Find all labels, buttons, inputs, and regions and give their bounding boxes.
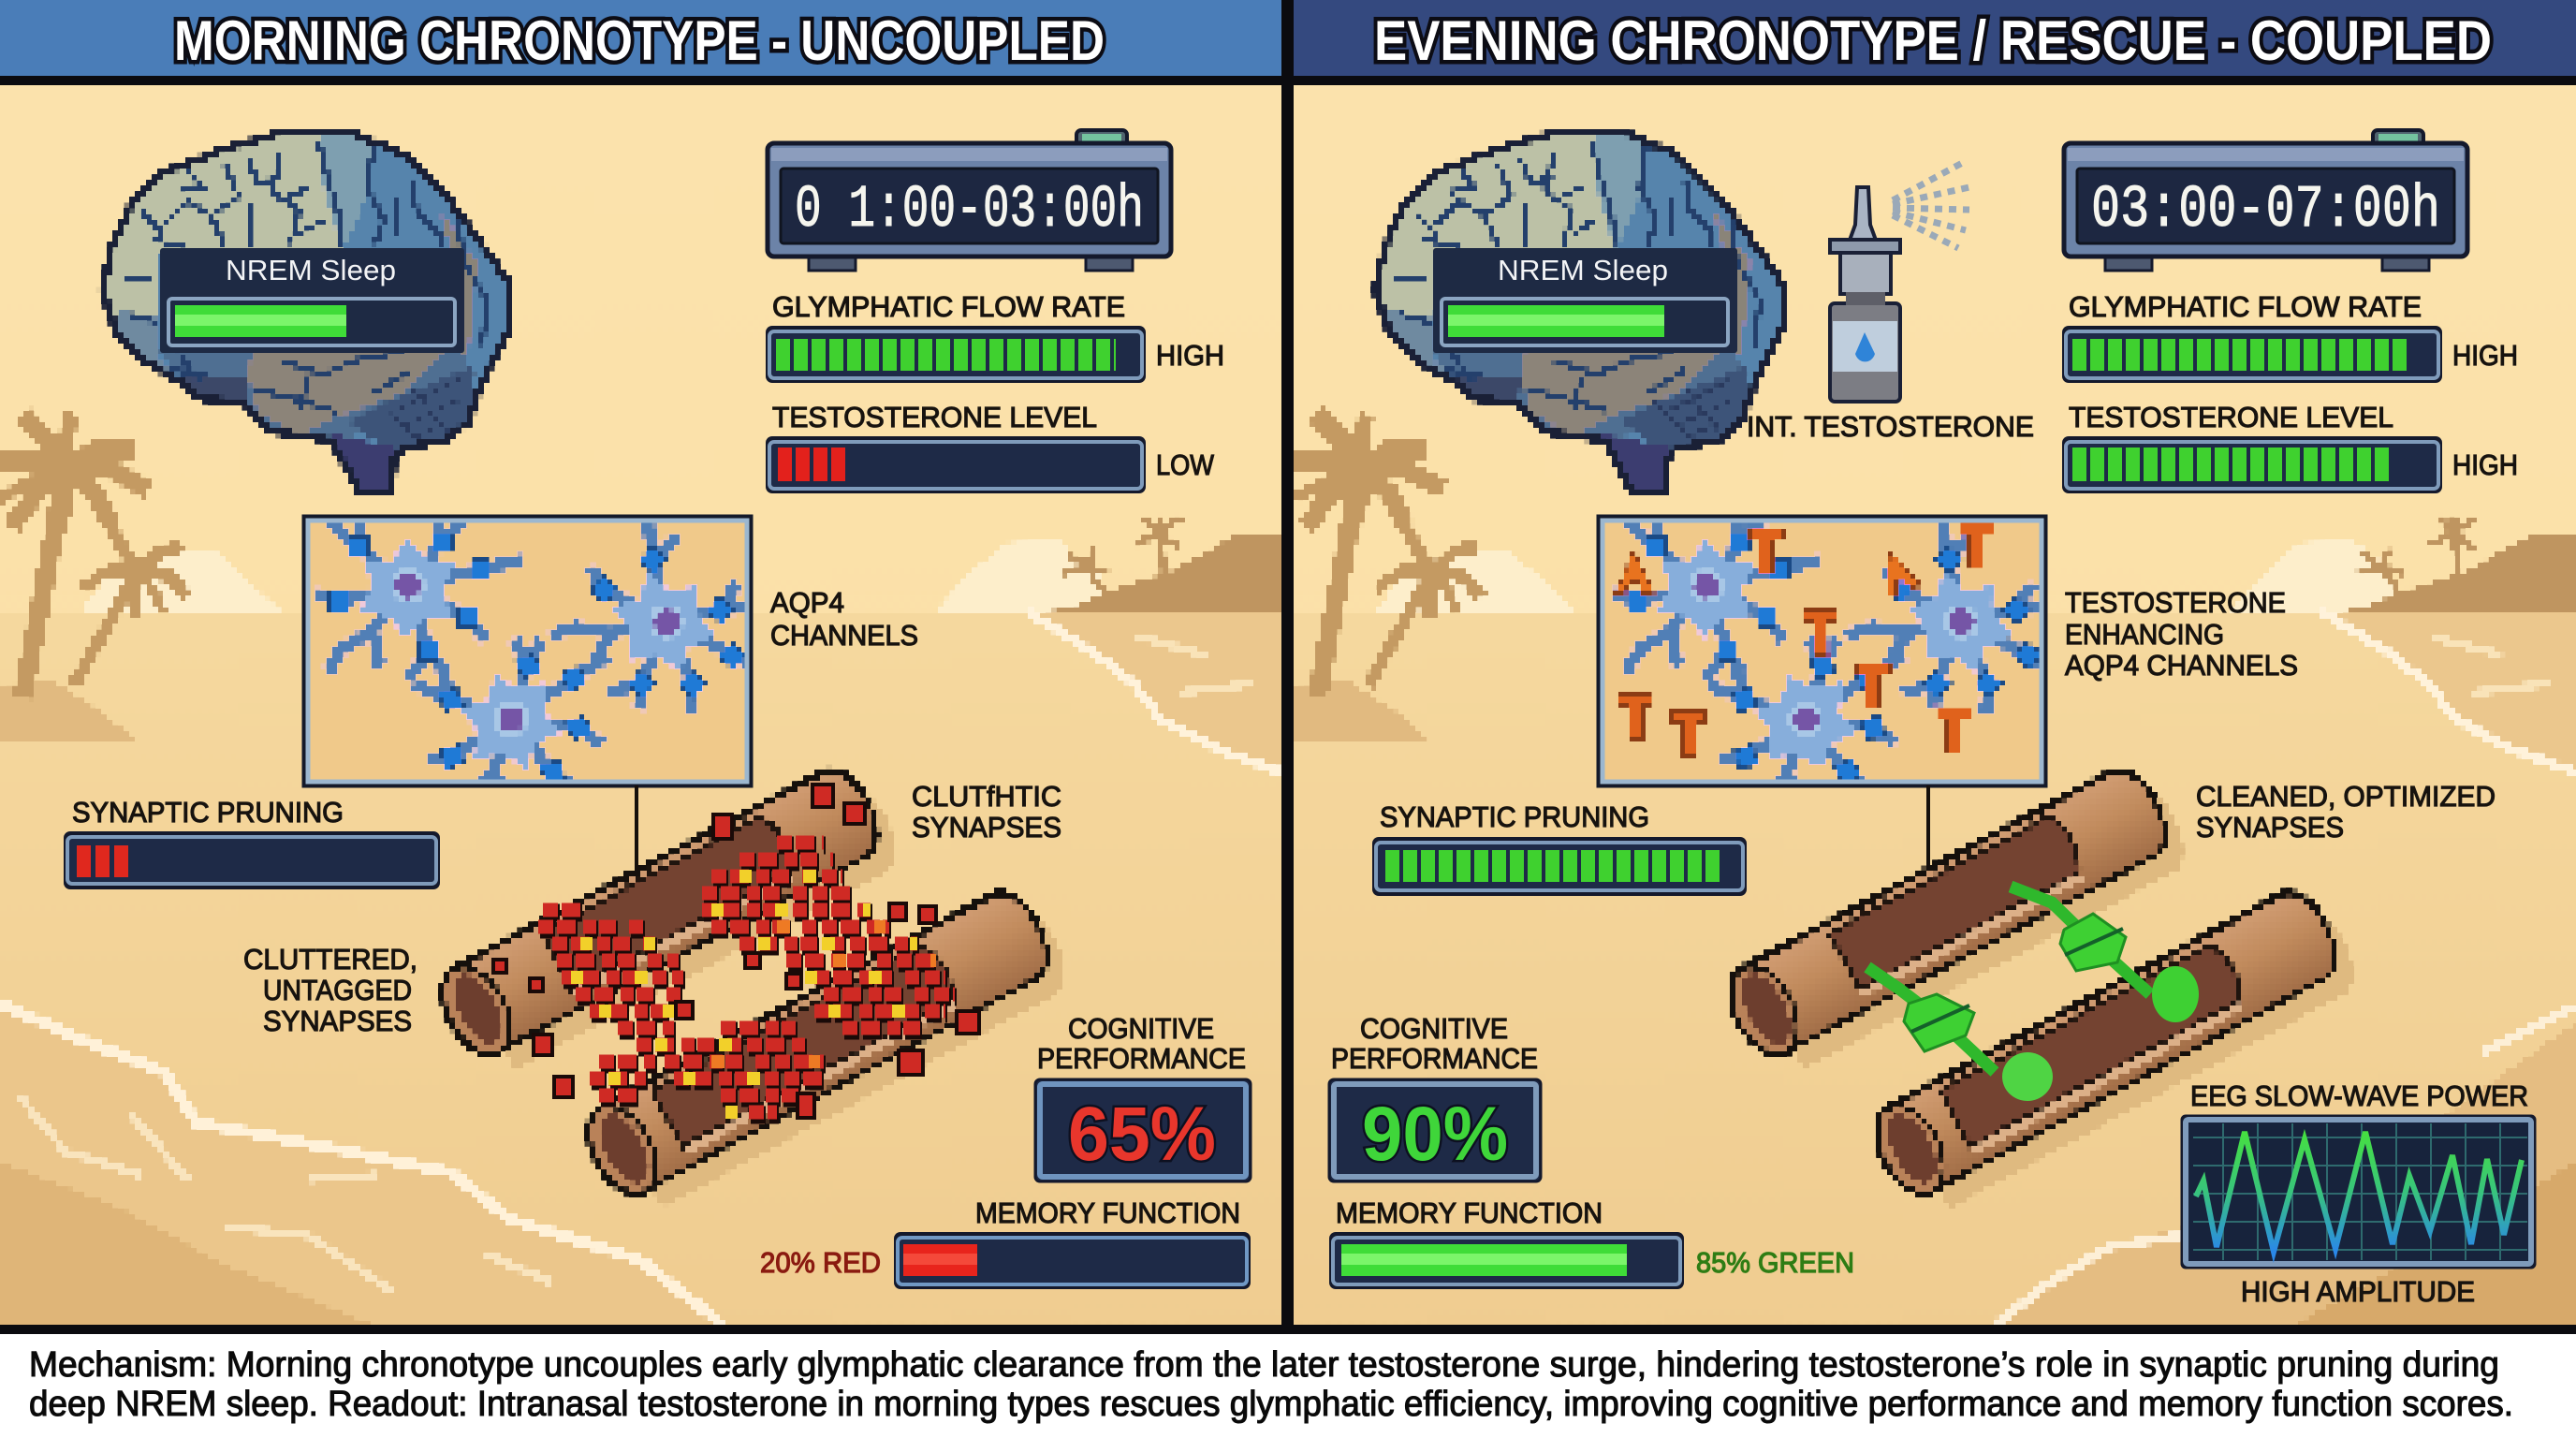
cognitive performance: 65%: PERFORMANCE xyxy=(1037,1042,1246,1075)
tubes with clean synapses xyxy=(1718,757,2364,1224)
synapse debris xyxy=(538,843,957,1115)
cognitive performance: 65% xyxy=(1035,1012,1251,1181)
label: cluttered, untagged synapses xyxy=(243,943,417,1037)
label: clutfhtic synapses xyxy=(912,780,1061,844)
memory function gauge: morning: 20% RED xyxy=(760,1246,881,1279)
cognitive performance: 65%: COGNITIVE xyxy=(1068,1012,1214,1045)
glymphatic flow gauge: evening: GLYMPHATIC FLOW RATE xyxy=(2069,290,2422,323)
memory function gauge: evening: MEMORY FUNCTION xyxy=(1336,1196,1603,1229)
EEG slow-wave chart: EEG SLOW-WAVE POWER xyxy=(2190,1079,2528,1112)
memory function gauge: morning xyxy=(760,1196,1251,1289)
label: clutfhtic synapses: SYNAPSES xyxy=(912,811,1061,844)
header: morning xyxy=(0,0,1281,76)
caption: Mechanism: Morning chronotype uncouples early glymphatic clearance from the later testosterone surge, hindering testosterone’s role in synaptic pruning during xyxy=(29,1345,2499,1385)
green synapse: upper xyxy=(2011,887,2199,1022)
caption xyxy=(29,1345,2513,1424)
label: AQP4 channels: AQP4 xyxy=(770,586,844,619)
label: cleaned, optimized synapses: SYNAPSES xyxy=(2196,811,2344,844)
header: evening xyxy=(1294,0,2576,76)
testosterone gauge: morning: TESTOSTERONE LEVEL xyxy=(772,401,1097,433)
NREM sleep gauge xyxy=(1433,248,1737,353)
glymphatic flow gauge: morning xyxy=(766,290,1224,383)
timer: morning xyxy=(768,130,1171,271)
memory function gauge: evening xyxy=(1329,1196,1854,1289)
label: testosterone enhancing AQP4 channels xyxy=(2065,586,2298,682)
label: cluttered, untagged synapses: UNTAGGED xyxy=(263,974,412,1006)
cognitive performance: 90%: COGNITIVE xyxy=(1360,1012,1508,1045)
label: testosterone enhancing AQP4 channels: ENHANCING xyxy=(2065,618,2224,651)
label: cluttered, untagged synapses: SYNAPSES xyxy=(263,1005,412,1037)
panel background: evening xyxy=(1295,85,2576,1325)
NREM sleep gauge: NREM Sleep xyxy=(1498,254,1668,286)
cognitive performance: 90%: 90% xyxy=(1362,1092,1508,1177)
EEG slow-wave chart: HIGH AMPLITUDE xyxy=(2241,1275,2475,1308)
testosterone gauge: evening: HIGH xyxy=(2452,448,2518,481)
label: testosterone enhancing AQP4 channels: AQP4 CHANNELS xyxy=(2065,649,2298,682)
NREM sleep gauge: NREM Sleep xyxy=(226,254,396,286)
testosterone gauge: morning: LOW xyxy=(1156,448,1215,481)
synaptic pruning gauge: evening xyxy=(1372,800,1747,896)
title: morning chronotype: MORNING CHRONOTYPE - UNCOUPLED xyxy=(174,9,1105,72)
memory function gauge: evening: 85% GREEN xyxy=(1696,1246,1854,1279)
glymphatic flow gauge: evening xyxy=(2062,290,2518,383)
NREM sleep gauge xyxy=(160,248,464,353)
glymphatic flow gauge: morning: GLYMPHATIC FLOW RATE xyxy=(772,290,1125,323)
brain: evening xyxy=(1367,131,1782,496)
green synapse: lower xyxy=(1867,967,2053,1101)
label: clutfhtic synapses: CLUTfHTIC xyxy=(912,780,1061,813)
panel background: morning xyxy=(0,85,1281,1325)
glymphatic flow gauge: morning: HIGH xyxy=(1156,339,1224,372)
tubes with cluttered synapses xyxy=(430,757,1076,1224)
label: AQP4 channels: CHANNELS xyxy=(770,619,918,652)
brain: morning xyxy=(94,131,509,496)
synaptic pruning gauge: morning xyxy=(64,796,440,889)
synaptic pruning gauge: evening: SYNAPTIC PRUNING xyxy=(1380,800,1649,833)
testosterone gauge: evening: TESTOSTERONE LEVEL xyxy=(2069,401,2393,433)
label: cleaned, optimized synapses: CLEANED, OPTIMIZED xyxy=(2196,780,2496,813)
EEG slow-wave chart xyxy=(2182,1079,2535,1308)
memory function gauge: morning: MEMORY FUNCTION xyxy=(975,1196,1240,1229)
glymphatic flow gauge: evening: HIGH xyxy=(2452,339,2518,372)
spray mist xyxy=(1893,161,1969,248)
label: cleaned, optimized synapses xyxy=(2196,780,2496,844)
testosterone gauge: evening xyxy=(2062,401,2518,493)
label: int. testosterone: INT. TESTOSTERONE xyxy=(1747,410,2034,443)
cognitive performance: 90% xyxy=(1329,1012,1541,1181)
astrocyte panel: evening with testosterone xyxy=(1597,515,2048,788)
cognitive performance: 90%: PERFORMANCE xyxy=(1331,1042,1538,1075)
testosterone gauge: morning xyxy=(766,401,1215,493)
label: AQP4 channels xyxy=(770,586,918,652)
label: cluttered, untagged synapses: CLUTTERED, xyxy=(243,943,417,976)
label: testosterone enhancing AQP4 channels: TESTOSTERONE xyxy=(2065,586,2286,619)
timer: evening xyxy=(2064,130,2467,271)
cognitive performance: 65%: 65% xyxy=(1068,1092,1216,1177)
nasal spray xyxy=(1830,161,1969,402)
astrocyte panel: morning xyxy=(301,515,753,788)
synaptic pruning gauge: morning: SYNAPTIC PRUNING xyxy=(72,796,344,829)
caption: deep NREM sleep. Readout: Intranasal testosterone in morning types rescues glymphatic efficiency, improving cognitive performance and memory function scores. xyxy=(29,1385,2513,1424)
timer: evening: 03:00-07:00h xyxy=(2091,177,2440,244)
timer: morning: 0 1:00-03:00h xyxy=(795,177,1144,244)
